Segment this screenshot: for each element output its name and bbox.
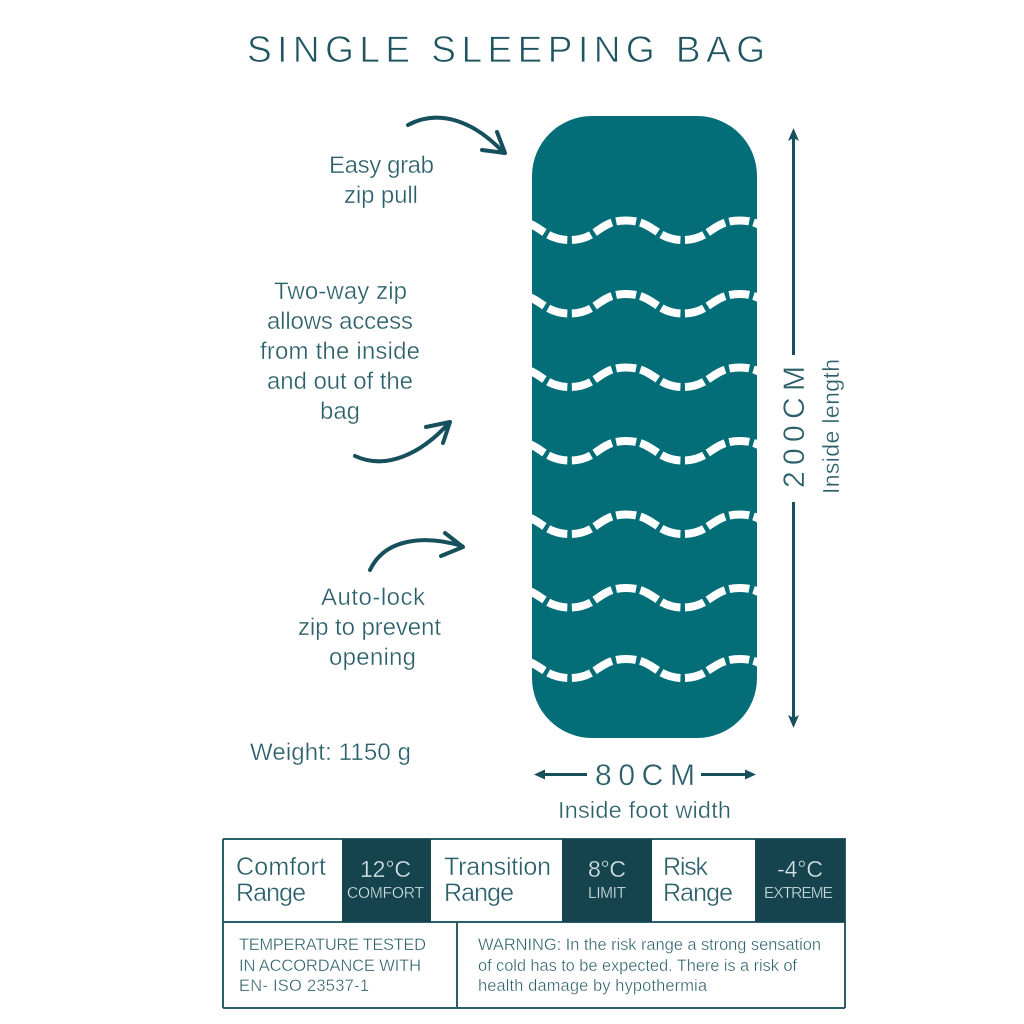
text: easy grab zip pull: Easy grab xyxy=(329,152,434,179)
text: two-way zip: from the inside xyxy=(260,338,420,365)
sleeping bag illustration xyxy=(532,116,757,738)
cell: comfort value: COMFORT xyxy=(347,885,425,902)
text: auto-lock zip: opening xyxy=(329,644,416,671)
text: temperature tested: EN- ISO 23537-1 xyxy=(239,977,369,995)
label: comfort range: Range xyxy=(236,879,306,907)
text: weight: Weight: 1150 g xyxy=(250,739,411,766)
text: two-way zip: bag xyxy=(320,398,360,425)
text: inside length: Inside length xyxy=(818,359,844,494)
text: auto-lock zip: zip to prevent xyxy=(298,614,441,641)
label: risk range: Risk xyxy=(663,853,708,881)
text: two-way zip: and out of the xyxy=(267,368,413,395)
text: temperature tested: TEMPERATURE TESTED xyxy=(239,936,426,954)
label: risk range: Range xyxy=(663,879,733,907)
label: transition range: Range xyxy=(444,879,514,907)
cell: limit value: 8°C xyxy=(588,856,626,882)
arrow: easy grab zip pull xyxy=(408,118,505,153)
text: inside foot width: Inside foot width xyxy=(558,797,731,823)
cell: extreme value: -4°C xyxy=(777,856,823,882)
cell: extreme value: EXTREME xyxy=(764,885,833,902)
text: 200 cm: 200CM xyxy=(778,366,811,488)
temperature table xyxy=(223,839,845,1008)
text: warning: of cold has to be expected. There is a risk of xyxy=(478,957,797,975)
label: transition range: Transition xyxy=(444,853,551,881)
dimension: width arrow xyxy=(534,770,756,780)
cell: limit value: LIMIT xyxy=(588,885,627,902)
label: comfort range: Comfort xyxy=(236,853,326,881)
text: auto-lock zip: Auto-lock xyxy=(321,584,426,611)
text: temperature tested: IN ACCORDANCE WITH xyxy=(239,957,421,975)
text: warning: health damage by hypothermia xyxy=(478,977,708,995)
text: two-way zip: allows access xyxy=(267,308,413,335)
text: warning: WARNING: In the risk range a strong sensation xyxy=(478,936,821,954)
cell: comfort value xyxy=(342,839,431,922)
text: two-way zip: Two-way zip xyxy=(274,278,407,305)
text: easy grab zip pull: zip pull xyxy=(344,182,418,209)
dimension: length arrow xyxy=(788,128,799,728)
text: 80 cm: 80CM xyxy=(595,759,695,792)
cell: limit value xyxy=(562,839,652,922)
arrow: auto-lock zip xyxy=(370,533,463,570)
arrow: two-way zip xyxy=(355,422,450,461)
cell: comfort value: 12°C xyxy=(360,856,411,882)
cell: extreme value xyxy=(755,839,845,922)
title: SINGLE SLEEPING BAG xyxy=(247,29,765,70)
